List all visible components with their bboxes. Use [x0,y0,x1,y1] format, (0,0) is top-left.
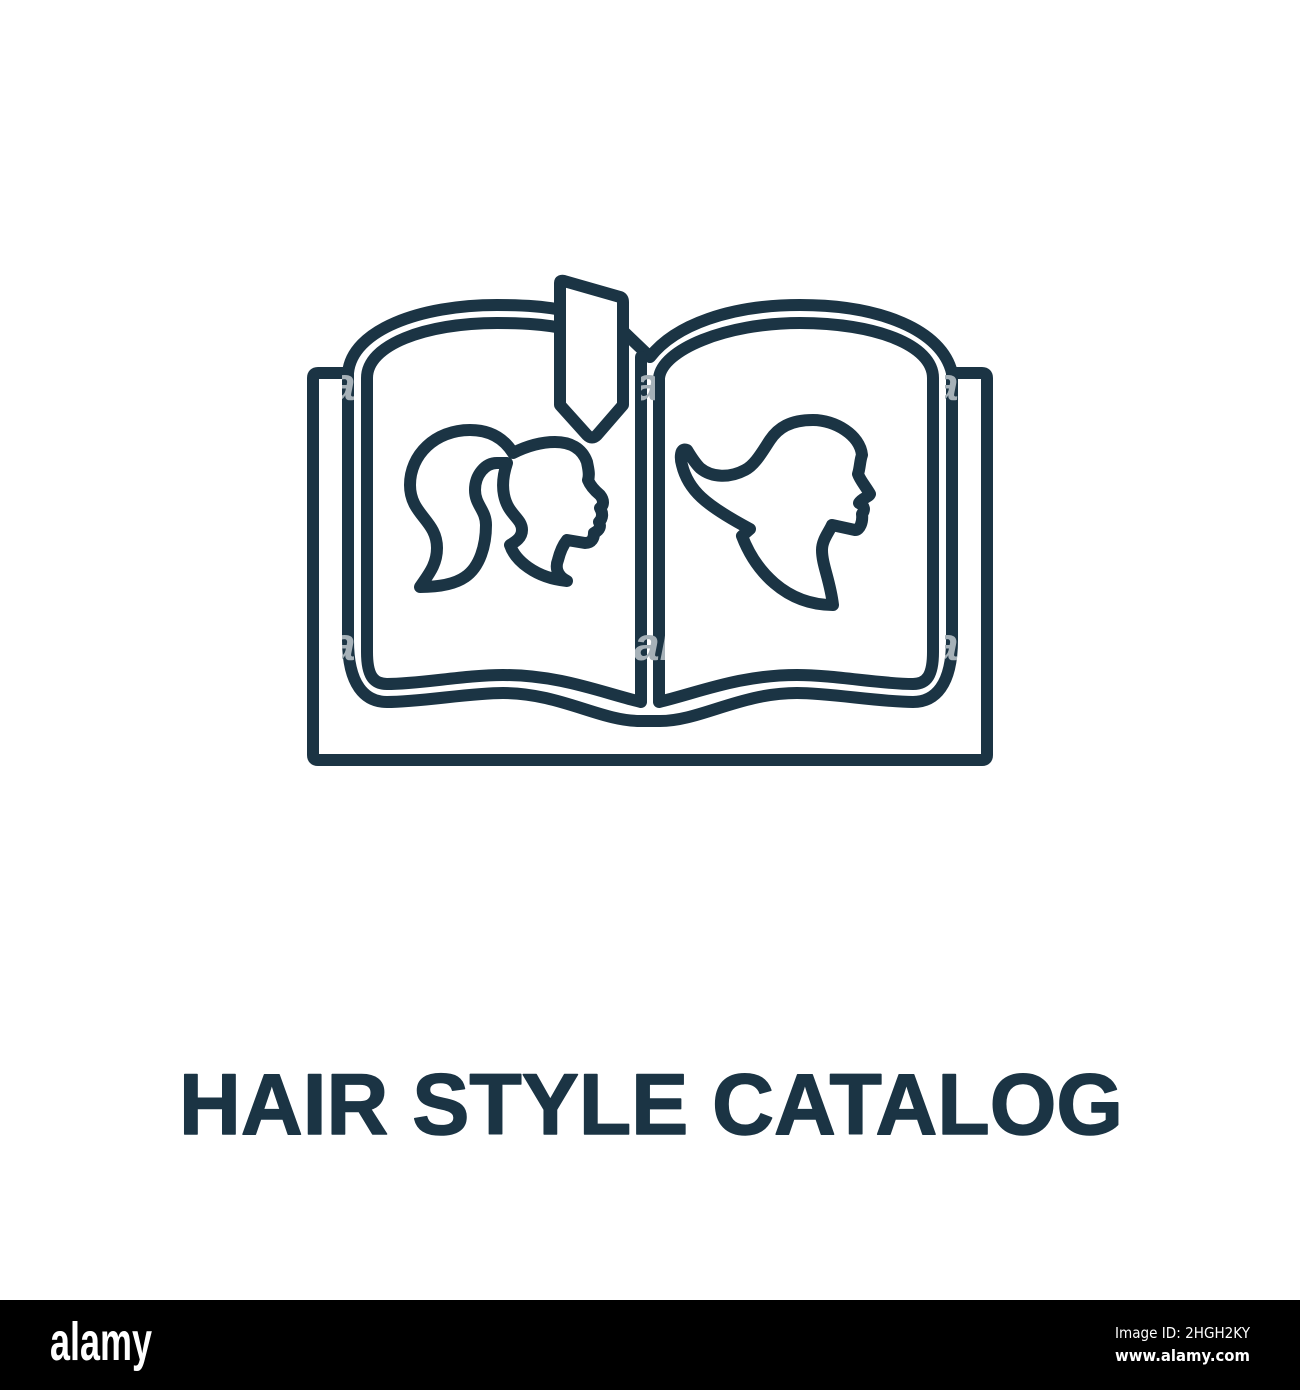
watermark fragments: an [634,618,688,670]
website: www.alamy.com [1115,1346,1250,1365]
watermark fragments: a [634,358,660,410]
portrait: woman with ponytail [410,430,603,587]
book cover outline [348,305,952,721]
footer bar [0,1300,1300,1390]
logo: alamy: alamy [50,1312,152,1372]
watermark fragments [342,375,958,660]
book base [313,373,987,760]
image id: Image ID: 2HGH2KY [1115,1324,1251,1342]
left page [367,323,641,702]
watermark fragments: a [933,618,959,670]
title: HAIR STYLE CATALOG [179,1057,1123,1153]
watermark fragments: a [330,618,356,670]
icon: open book catalog [313,281,987,760]
right page [659,323,933,702]
portrait: woman with flowing hair [681,420,870,605]
watermark fragments: a [330,358,356,410]
watermark fragments: a [933,358,959,410]
bookmark [560,281,623,438]
